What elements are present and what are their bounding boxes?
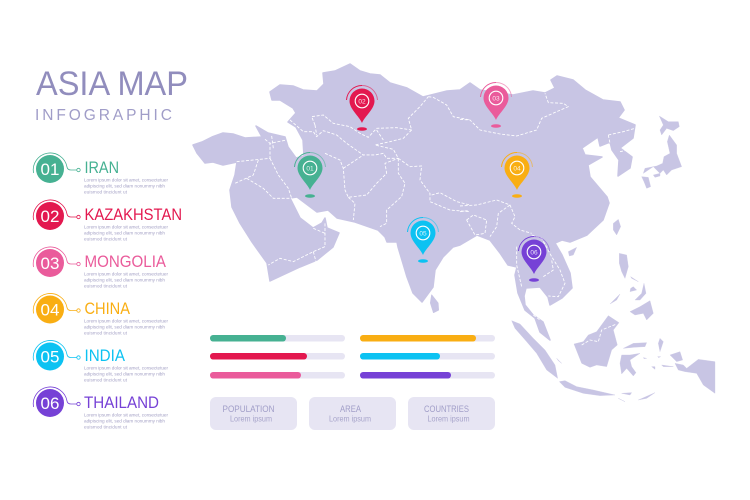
list item: China: Lorem ipsum dolor sit amet, consectetuer (84, 318, 168, 324)
card: countries: Lorem ipsum (428, 414, 470, 424)
list item: Mongolia: euismod tincidunt ut (84, 284, 128, 288)
pin 01 (294, 152, 326, 198)
pin 06 (518, 236, 550, 282)
list item: China: euismod tincidunt ut (84, 330, 128, 336)
bar chart (210, 335, 495, 378)
pin 03: 03 (492, 95, 500, 102)
list item: India (33, 340, 168, 382)
list item: Kazakhstan (33, 200, 182, 242)
list item: China: adipiscing elit, sed diam nonummy nibh (84, 324, 165, 330)
list item: Iran: 01 (41, 160, 59, 179)
list item: Mongolia: 03 (41, 254, 59, 273)
list item: India: Lorem ipsum dolor sit amet, consectetuer (84, 366, 168, 370)
pin 04 (502, 152, 532, 198)
list item: Iran: IRAN (84, 158, 119, 177)
list item: Iran (33, 153, 168, 194)
list item: Thailand (33, 387, 168, 430)
pin 04: 04 (513, 165, 521, 172)
list item: India: 05 (41, 348, 59, 366)
list item: Iran: Lorem ipsum dolor sit amet, consectetuer (84, 178, 168, 182)
list item: China: 04 (41, 300, 59, 320)
list item: Kazakhstan: euismod tincidunt ut (84, 236, 128, 242)
list item: Mongolia: MONGOLIA (84, 252, 167, 271)
pin 02 (346, 85, 378, 131)
card: countries: COUNTRIES (424, 404, 469, 414)
list item: China: CHINA (84, 299, 131, 318)
pin 06: 06 (530, 249, 538, 256)
card: area: Lorem ipsum (329, 414, 371, 424)
list item: Thailand: adipiscing elit, sed diam nonummy nibh (84, 418, 165, 424)
list item: Thailand: Lorem ipsum dolor sit amet, consectetuer (84, 412, 168, 418)
pin 05: 05 (419, 230, 427, 237)
islands (430, 116, 715, 402)
list item: Thailand: euismod tincidunt ut (84, 424, 128, 430)
list item: India: INDIA (84, 346, 126, 365)
list item: Mongolia (33, 247, 168, 288)
pin 02: 02 (358, 98, 366, 105)
pin 05 (408, 217, 438, 263)
list item: Kazakhstan: Lorem ipsum dolor sit amet, consectetuer (84, 224, 168, 230)
list item: Kazakhstan: 02 (41, 207, 59, 226)
pin 03 (480, 82, 512, 128)
list item: Thailand: 06 (41, 394, 59, 413)
card: population: Lorem ipsum (230, 414, 272, 424)
list item: Kazakhstan: adipiscing elit, sed diam nonummy nibh (84, 230, 165, 236)
list item: India: euismod tincidunt ut (84, 378, 128, 382)
title: ASIA MAP (36, 65, 188, 103)
country borders (235, 97, 470, 265)
list item: Mongolia: Lorem ipsum dolor sit amet, consectetuer (84, 272, 168, 276)
pin 01: 01 (306, 165, 314, 172)
card: population: POPULATION (222, 404, 274, 414)
card: area: AREA (340, 404, 361, 414)
card: population (210, 397, 297, 430)
list item: Iran: adipiscing elit, sed diam nonummy nibh (84, 184, 165, 188)
list item: Thailand: THAILAND (84, 393, 159, 412)
list item: Iran: euismod tincidunt ut (84, 190, 128, 194)
list item: India: adipiscing elit, sed diam nonummy nibh (84, 372, 165, 376)
subtitle: INFOGRAPHIC (35, 107, 172, 124)
mainland (193, 64, 635, 340)
card: area (309, 397, 396, 430)
list item: Kazakhstan: KAZAKHSTAN (84, 205, 182, 224)
list item: Mongolia: adipiscing elit, sed diam nonummy nibh (84, 278, 165, 282)
card: countries (408, 397, 495, 430)
map of Asia (193, 64, 715, 402)
list item: China (33, 293, 168, 336)
